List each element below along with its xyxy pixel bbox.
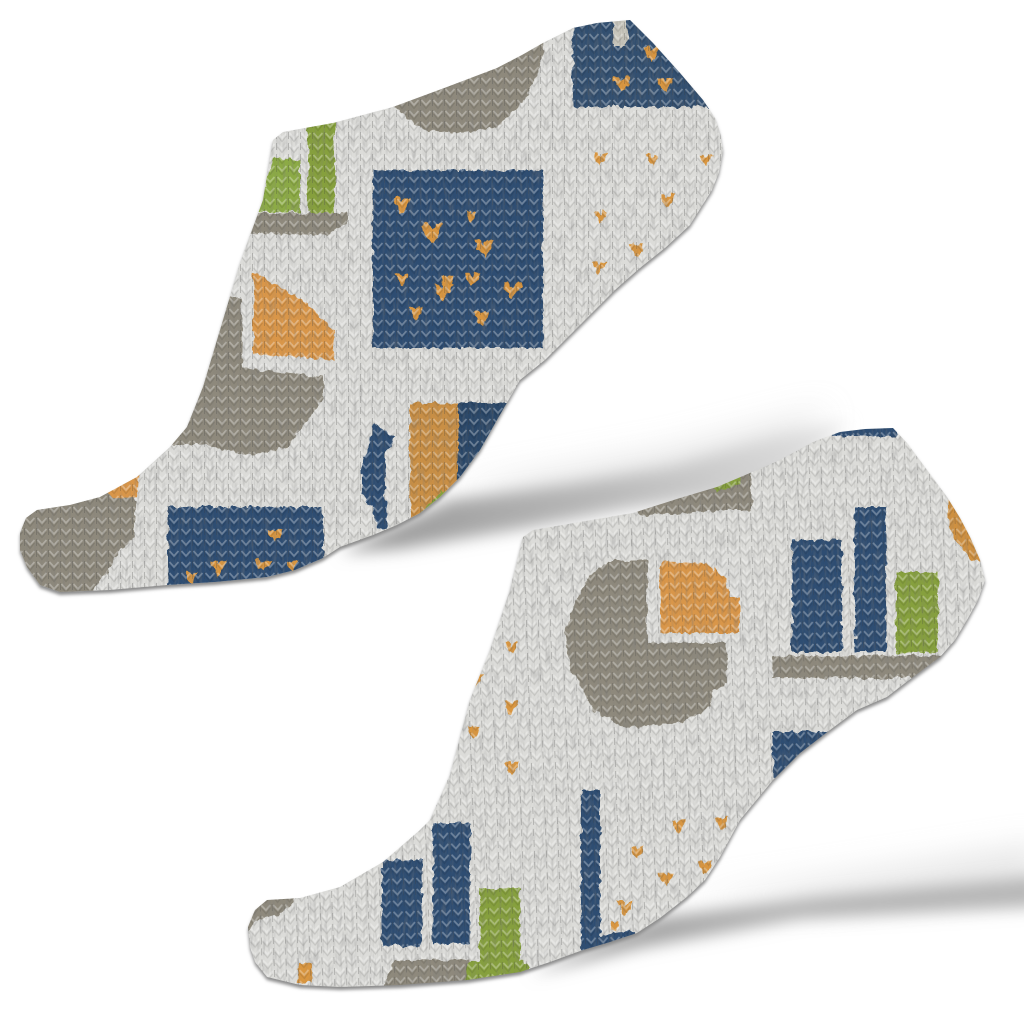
texture: knit stitches [20,20,723,592]
panel: navy square with orange hearts [373,170,543,348]
contact shadow: top sock [20,23,723,595]
pie chart: orange slice [253,272,335,360]
shape: grey circle at toe [10,480,135,600]
panel: navy rectangle at sole [168,507,323,592]
hearts: scattered on grey knit [298,642,728,983]
shadow: top sock [340,410,850,553]
shape: navy strip at cuff [832,428,898,438]
shape: navy patch [773,732,848,802]
shape: grey half circle at cuff [394,42,544,134]
bar: green bar near toe [465,888,530,990]
shape: orange patch at heel [948,500,980,562]
bar chart: orange and navy bars [410,403,518,522]
bar: thin navy bar [581,790,635,965]
colour blocks: top sock [10,10,713,600]
pie chart: grey arc [565,560,727,728]
shape: grey shelf [773,656,963,678]
shape: orange patch at toe [108,474,140,498]
shape: grey shelf [240,213,347,235]
hearts: scattered on grey knit [593,153,712,273]
shape: grey patch at toe [245,895,297,935]
bar chart: navy and green bars [792,507,938,653]
bar chart: green bars [258,118,335,213]
icon: small navy stem [362,423,395,530]
shape: green patch at cuff [714,477,741,492]
pie chart: grey arc [160,297,323,455]
sock: bottom [248,428,985,987]
sock: top [20,20,723,592]
colour blocks: bottom sock [245,420,985,995]
bar chart: navy bars near toe [382,823,470,946]
pie chart: orange slice [660,562,740,633]
shape: grey shelf near toe [382,960,470,995]
panel: navy rectangle at heel [573,10,713,107]
texture: knit stitches [248,428,984,987]
texture: fibre noise [250,428,983,987]
shadow: bottom sock [530,845,1024,975]
texture: fibre noise [20,20,722,590]
contact shadow: bottom sock [248,431,985,990]
shape: grey patch at cuff [630,470,752,516]
